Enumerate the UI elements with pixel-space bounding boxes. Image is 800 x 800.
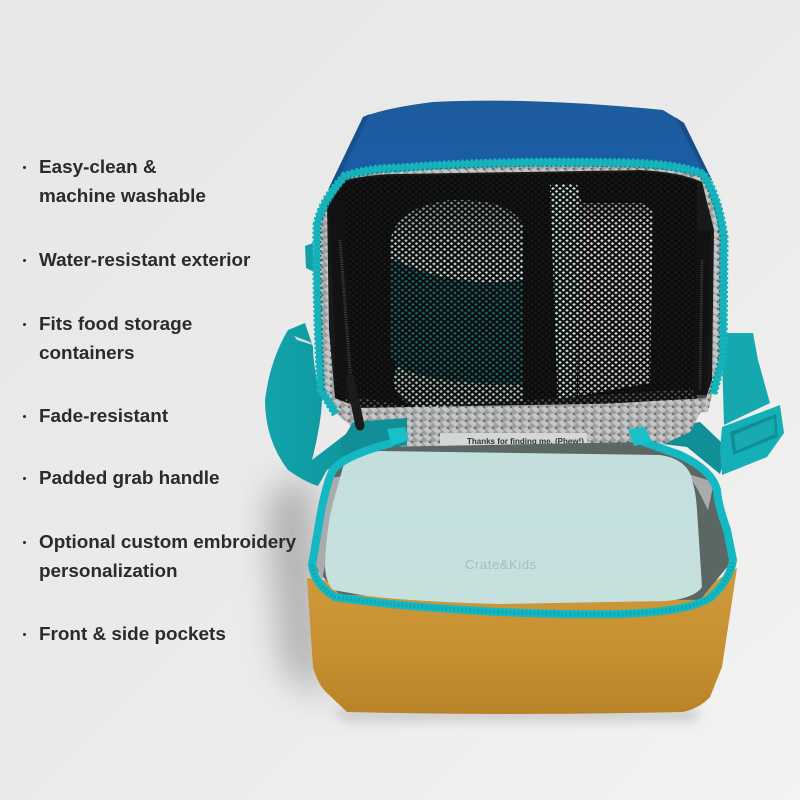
feature: easy clean: machine washable [39,186,206,207]
embossed brand: Crate&Kids [465,557,537,572]
lower compartment [312,427,733,614]
feature: fade resistant: Fade-resistant [39,406,168,427]
feature: fits containers: containers [39,343,135,364]
zipper tape lower [312,440,733,614]
feature: grab handle: Padded grab handle [39,468,220,489]
inner lining [312,442,733,600]
label: Thanks for finding me. (Phew!) [467,437,584,446]
feature: pockets: Front & side pockets [39,624,226,645]
food storage lid [325,451,702,604]
feature: easy clean [23,157,206,207]
feature: embroidery: Optional custom embroidery [39,532,296,553]
panel below the opening with name label [340,402,706,458]
right side zipper [693,388,706,396]
buckle [720,405,784,475]
feature: fits containers: Fits food storage [39,314,192,335]
upper compartment [317,162,724,427]
feature: easy clean: Easy-clean & [39,157,157,178]
feature: embroidery: personalization [39,561,178,582]
label: Plz contact my BFF [485,445,554,454]
feature: fits containers [23,314,192,364]
zipper pulls [387,427,409,446]
zipper teeth lower [312,560,733,614]
silver corner lining [316,476,345,580]
blue top flap of the bag [328,101,712,190]
upright container [550,184,582,412]
tan lower body [307,568,737,714]
zipper pull on left of lower pocket [350,378,360,426]
left shoulder strap [265,243,385,486]
black interior [327,170,714,410]
cast shadows [268,470,700,722]
insulated jar [390,200,523,410]
teal tape corners [340,418,407,458]
feature: embroidery [23,532,296,582]
silver lining [318,164,722,427]
floor lining [345,389,706,408]
label [440,433,587,457]
feature: water resistant: Water-resistant exterior [39,250,250,271]
steel container [578,203,653,396]
mesh pocket [335,172,697,412]
zipper teeth upper [317,162,724,414]
right shoulder strap and buckle [627,333,784,475]
left side zipper [329,202,330,203]
feature list [23,157,296,645]
